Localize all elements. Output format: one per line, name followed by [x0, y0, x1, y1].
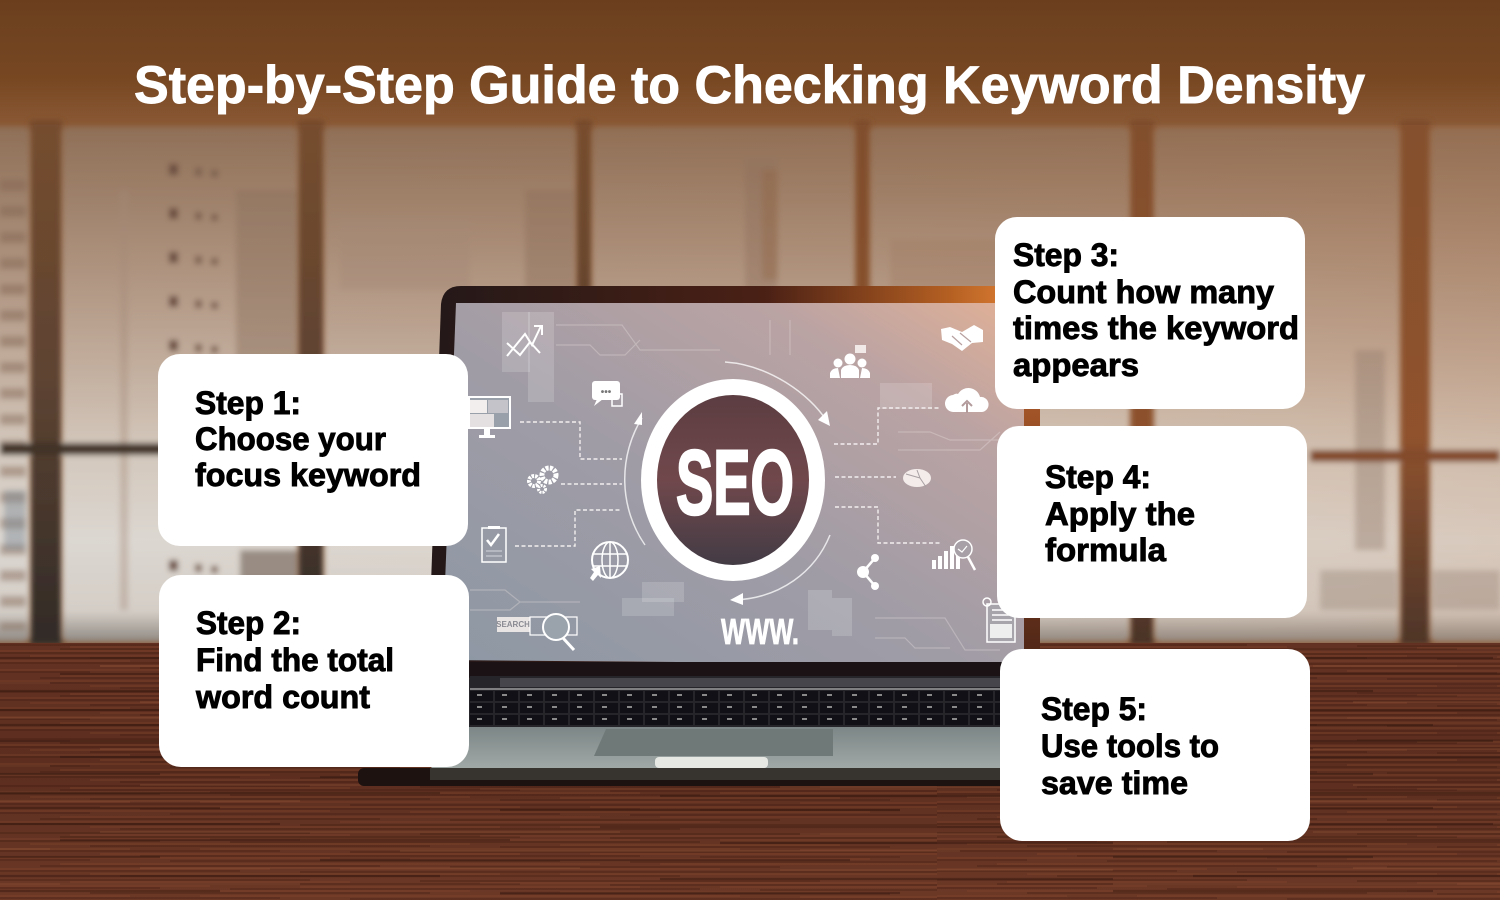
icon: growth chart arrow: [507, 326, 542, 356]
icon: document with key: [983, 598, 1015, 642]
card: step 5: Step 5:: [1041, 691, 1147, 727]
laptop right bezel edge: [1024, 303, 1040, 668]
icon: globe with cursor: [590, 542, 628, 581]
card: step 3: Count how many: [1013, 274, 1274, 310]
icon: search bar with magnifier: SEARCH: [496, 620, 530, 629]
icon: clipboard checklist: [482, 526, 506, 562]
card: step 3: Step 3:: [1013, 237, 1119, 273]
card: step 4: Step 4:: [1045, 459, 1151, 495]
card: step 2: word count: [195, 679, 370, 715]
icon: monitor: [469, 397, 510, 438]
icon: pie chart: [903, 469, 931, 487]
icon: gears: [529, 468, 556, 492]
window mullions: [30, 120, 1430, 645]
card: step 1: Choose your: [195, 421, 386, 457]
title: Step-by-Step Guide to Checking Keyword Density: [134, 56, 1366, 115]
card: step 5: save time: [1041, 765, 1188, 801]
card: step 4: [997, 426, 1307, 618]
icon: share nodes: [857, 554, 879, 590]
faint circuit decoration: [470, 312, 1000, 650]
icon: handshake: [941, 325, 983, 351]
card: step 1: Step 1:: [195, 385, 301, 421]
card: step 1: focus keyword: [195, 457, 421, 493]
icon: chat bubbles: •••: [601, 387, 612, 398]
keyboard deck: [440, 662, 1040, 727]
laptop with SEO screen: [358, 286, 1040, 786]
icon: bar chart with magnifier: [932, 540, 975, 570]
card: step 2: Find the total: [196, 642, 394, 678]
card: step 4: formula: [1045, 532, 1166, 568]
icon: people group: [830, 345, 870, 378]
background: blurred window and city view: [0, 0, 1500, 645]
laptop screen: [442, 303, 1024, 665]
card: step 5: Use tools to: [1041, 728, 1219, 764]
laptop lid bezel: [428, 286, 1040, 668]
icon: search bar with magnifier: [496, 614, 577, 650]
laptop base and trackpad: [430, 727, 1040, 780]
icon: chat bubbles: [592, 381, 622, 406]
card: step 1: [158, 354, 468, 546]
card: step 3: appears: [1013, 347, 1139, 383]
SEO badge: SEO: [676, 432, 794, 534]
icon: cloud upload: [945, 388, 989, 413]
card: step 3: [995, 217, 1305, 409]
card: step 2: Step 2:: [196, 605, 301, 641]
dashed connectors: [515, 408, 940, 546]
card: step 5: [1000, 649, 1310, 841]
card: step 2: [159, 575, 469, 767]
circular arrows around badge: [625, 362, 830, 605]
card: step 4: Apply the: [1045, 496, 1195, 532]
laptop shadow on table: [358, 768, 1008, 786]
wooden table: [0, 643, 1500, 900]
card: step 3: times the keyword: [1013, 310, 1299, 346]
SEO badge: [649, 387, 817, 573]
WWW label: WWW.: [721, 611, 799, 652]
